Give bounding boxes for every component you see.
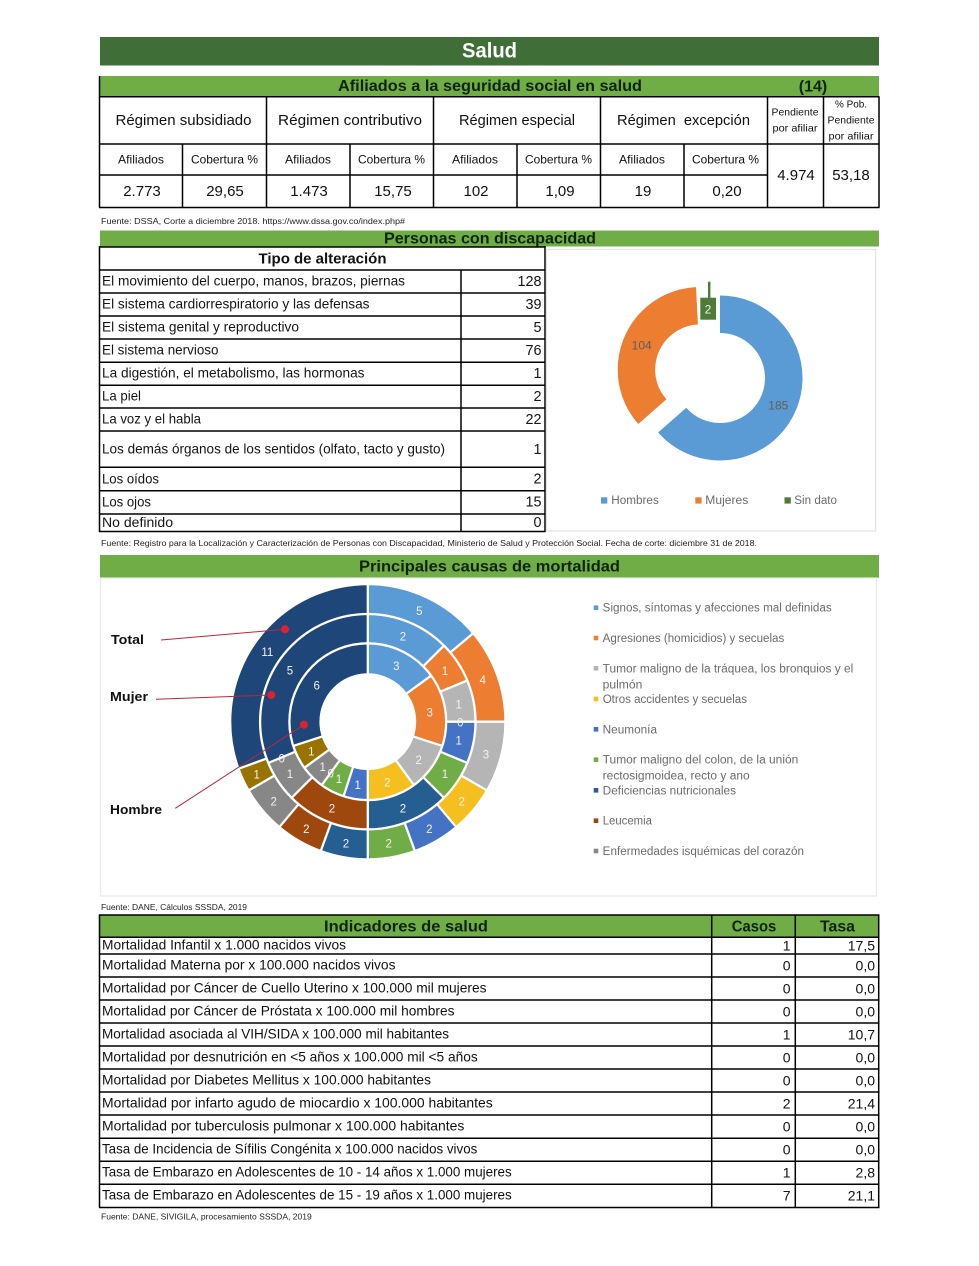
legend: causas de mortalidad: Tumor maligno de la tráquea, los bronquios y el xyxy=(603,663,853,675)
values: afiliados y cobertura: 15,75 xyxy=(374,183,412,200)
column headers: pendiente por afiliar: % Pob. xyxy=(835,98,867,110)
row: mortalidad materna: 0,0 xyxy=(856,957,875,973)
row: movimiento: El movimiento del cuerpo, manos, brazos, piernas xyxy=(102,273,405,289)
row: infarto xyxy=(102,1095,875,1111)
row: oidos: 2 xyxy=(533,471,542,487)
heading: afiliados: (14) xyxy=(799,78,827,96)
data labels: mujer: 1 xyxy=(287,769,293,781)
row: mortalidad infantil: 17,5 xyxy=(848,937,875,953)
column headers: pendiente por afiliar: Pendiente xyxy=(828,114,875,126)
title: Salud xyxy=(462,40,517,62)
source note: DANE calculos: Fuente: DANE, Cálculos SSSDA, 2019 xyxy=(101,902,247,912)
row: voz y habla: 22 xyxy=(525,412,542,428)
donut chart: 2 xyxy=(705,302,712,316)
row: voz y habla xyxy=(102,411,542,428)
values: afiliados y cobertura xyxy=(123,167,870,200)
values: afiliados y cobertura: 0,20 xyxy=(712,183,742,200)
data labels: hombre xyxy=(308,661,433,792)
row: mortalidad infantil: Mortalidad Infantil x 1.000 nacidos vivos xyxy=(102,937,346,953)
data labels: total: 2 xyxy=(385,838,392,850)
sub-headers: afiliados y cobertura: Afiliados xyxy=(118,152,164,166)
data labels: mujer: 2 xyxy=(329,803,335,815)
row: VIH/SIDA: 10,7 xyxy=(848,1026,875,1042)
legend: causas de mortalidad: Enfermedades isquémicas del corazón xyxy=(603,846,804,858)
legend: causas de mortalidad: Tumor maligno del colon, de la unión xyxy=(603,755,798,767)
data labels: total: 2 xyxy=(343,838,349,850)
row: genital: El sistema genital y reproductivo xyxy=(102,319,299,335)
row: embarazo 10-14 xyxy=(102,1164,875,1180)
data labels: total: 2 xyxy=(458,797,465,809)
sub-headers: afiliados y cobertura xyxy=(118,152,759,166)
row: movimiento xyxy=(102,273,542,290)
row: ojos xyxy=(102,493,542,510)
legend: sexo xyxy=(601,495,837,507)
data labels: total xyxy=(253,606,489,850)
data labels: total: 1 xyxy=(253,769,260,781)
column headers: pendiente por afiliar: por afiliar xyxy=(828,130,874,142)
column headers: regimenes: Régimen excepción xyxy=(617,112,750,129)
row: tuberculosis: 0 xyxy=(783,1118,791,1134)
row: cardiorrespiratorio xyxy=(102,296,542,313)
legend: causas de mortalidad: Deficiencias nutricionales xyxy=(603,785,736,797)
sub-headers: afiliados y cobertura: Cobertura % xyxy=(525,152,592,166)
row: desnutricion: 0 xyxy=(783,1049,791,1065)
row: sifilis congenita: 0,0 xyxy=(856,1141,875,1157)
row: VIH/SIDA: Mortalidad asociada al VIH/SIDA x 100.000 mil habitantes xyxy=(102,1026,449,1042)
row: cancer de cuello uterino: Mortalidad por Cáncer de Cuello Uterino x 100.000 mil mujeres xyxy=(102,980,486,996)
row: infarto: 2 xyxy=(783,1095,791,1111)
row: genital: 5 xyxy=(533,320,542,336)
row: no definido: 0 xyxy=(533,515,542,531)
data labels: total: 4 xyxy=(479,675,486,687)
legend: causas de mortalidad: Leucemia xyxy=(603,816,653,828)
data labels: hombre: 1 xyxy=(354,780,361,792)
donut chart: 104 xyxy=(632,338,652,352)
callout: mujer xyxy=(110,689,275,704)
row: tuberculosis: 0,0 xyxy=(856,1118,875,1134)
data labels: hombre: 0 xyxy=(327,769,334,781)
data labels: hombre: 6 xyxy=(313,680,320,692)
row: infarto: 21,4 xyxy=(848,1095,875,1111)
row: cardiorrespiratorio: El sistema cardiorrespiratorio y las defensas xyxy=(102,296,370,312)
row: no definido xyxy=(102,514,542,531)
row: sifilis congenita xyxy=(102,1141,875,1157)
data labels: hombre: 1 xyxy=(308,747,315,759)
row: voz y habla: La voz y el habla xyxy=(102,411,201,427)
data labels: total: 2 xyxy=(303,824,310,836)
row: mortalidad materna xyxy=(102,957,875,973)
row: nervioso xyxy=(102,342,542,359)
row: mortalidad infantil xyxy=(102,937,875,953)
callout: total: Total xyxy=(111,632,144,647)
table header: tipo de alteracion: Tipo de alteración xyxy=(258,252,386,268)
legend: sexo: Mujeres xyxy=(705,495,749,507)
row: desnutricion xyxy=(102,1049,875,1065)
data labels: mujer: 1 xyxy=(442,666,448,678)
legend: sexo: Hombres xyxy=(611,495,659,507)
row: demas organos: Los demás órganos de los sentidos (olfato, tacto y gusto) xyxy=(102,441,445,457)
source note: DANE SIVIGILA: Fuente: DANE, SIVIGILA, procesamiento SSSDA, 2019 xyxy=(101,1212,312,1222)
row: infarto: Mortalidad por infarto agudo de miocardio x 100.000 habitantes xyxy=(102,1095,493,1111)
callout: hombre xyxy=(110,721,308,817)
values: afiliados y cobertura: 102 xyxy=(463,183,489,200)
values: afiliados y cobertura: 29,65 xyxy=(206,183,244,200)
heading: afiliados: Afiliados a la seguridad social en salud xyxy=(338,78,642,95)
row: embarazo 15-19: Tasa de Embarazo en Adolescentes de 15 - 19 años x 1.000 mujeres xyxy=(102,1187,512,1203)
donut chart xyxy=(632,282,789,442)
sub-headers: afiliados y cobertura: Afiliados xyxy=(619,152,665,166)
row: no definido: No definido xyxy=(102,514,173,530)
panel: mortalidad xyxy=(100,578,876,896)
panel: afiliados a la seguridad social xyxy=(99,76,880,208)
row: embarazo 10-14: Tasa de Embarazo en Adolescentes de 10 - 14 años x 1.000 mujeres xyxy=(102,1164,512,1180)
heading: afiliados xyxy=(100,76,879,96)
row: cancer de cuello uterino: 0 xyxy=(783,980,791,996)
values: afiliados y cobertura: 4.974 xyxy=(777,167,815,184)
table header: indicadores, casos, tasa: Tasa xyxy=(820,919,855,936)
row: piel: La piel xyxy=(102,388,141,404)
row: mortalidad materna: 0 xyxy=(783,957,791,973)
row: nervioso: El sistema nervioso xyxy=(102,342,219,358)
sub-headers: afiliados y cobertura: Afiliados xyxy=(452,152,498,166)
row: cancer de prostata: 0,0 xyxy=(856,1003,875,1019)
values: afiliados y cobertura: 53,18 xyxy=(832,167,870,184)
row: cancer de prostata xyxy=(102,1003,875,1019)
data labels: mujer: 1 xyxy=(455,699,462,711)
callout: hombre: Hombre xyxy=(110,802,162,817)
row: sifilis congenita: Tasa de Incidencia de Sífilis Congénita x 100.000 nacidos vivos xyxy=(102,1141,477,1157)
row: sifilis congenita: 0 xyxy=(783,1141,791,1157)
data labels: mujer: 2 xyxy=(400,631,406,643)
data labels: total: 3 xyxy=(483,749,489,761)
panel: donut personas con discapacidad xyxy=(546,250,876,531)
row: cancer de prostata: 0 xyxy=(783,1003,791,1019)
source note: registro: Fuente: Registro para la Localización y Caracterización de Personas con Discapacidad, Ministerio de Salud y Protección Social. Fecha de corte: diciembre 31 de 2018. xyxy=(101,538,757,548)
heading: personas con discapacidad xyxy=(100,230,879,248)
data labels: total: 2 xyxy=(270,797,277,809)
row: cancer de cuello uterino xyxy=(102,980,875,996)
sub-headers: afiliados y cobertura: Cobertura % xyxy=(358,152,425,166)
table header: indicadores, casos, tasa: Casos xyxy=(732,919,776,936)
row: VIH/SIDA xyxy=(102,1026,875,1042)
sub-headers: afiliados y cobertura: Cobertura % xyxy=(692,152,759,166)
row: ojos: 15 xyxy=(525,494,542,510)
row: embarazo 10-14: 1 xyxy=(783,1164,791,1180)
values: afiliados y cobertura: 1.473 xyxy=(290,183,328,200)
row: mortalidad materna: Mortalidad Materna por x 100.000 nacidos vivos xyxy=(102,957,396,973)
table header: indicadores, casos, tasa xyxy=(100,915,879,937)
row: diabetes: 0 xyxy=(783,1072,791,1088)
row: diabetes: 0,0 xyxy=(856,1072,875,1088)
row: VIH/SIDA: 1 xyxy=(783,1026,791,1042)
row: cardiorrespiratorio: 39 xyxy=(525,297,542,313)
data labels: mujer xyxy=(278,631,464,815)
data labels: mujer: 1 xyxy=(455,736,462,748)
row: embarazo 15-19: 21,1 xyxy=(848,1187,875,1203)
table: tipo de alteracion xyxy=(99,246,546,532)
row: oidos xyxy=(102,470,542,487)
data labels: total: 2 xyxy=(426,824,433,836)
legend: causas de mortalidad xyxy=(594,603,853,858)
column headers: pendiente por afiliar: Pendiente xyxy=(772,106,819,118)
row: embarazo 15-19 xyxy=(102,1187,875,1203)
data labels: hombre: 1 xyxy=(319,762,326,774)
heading: principales causas de mortalidad: Principales causas de mortalidad xyxy=(359,558,620,576)
row: mortalidad infantil: 1 xyxy=(783,937,791,953)
data labels: total: 5 xyxy=(416,606,423,618)
row: diabetes xyxy=(102,1072,875,1088)
sub-headers: afiliados y cobertura: Afiliados xyxy=(285,152,331,166)
sunburst chart xyxy=(238,584,506,859)
legend: causas de mortalidad: Signos, síntomas y afecciones mal definidas xyxy=(603,603,832,615)
column headers: regimenes: Régimen especial xyxy=(459,112,575,129)
heading: personas con discapacidad: Personas con discapacidad xyxy=(384,231,596,248)
row: desnutricion: Mortalidad por desnutrición en <5 años x 100.000 mil <5 años xyxy=(102,1049,478,1065)
column headers: pendiente por afiliar xyxy=(772,98,875,142)
row: digestion: 1 xyxy=(533,366,542,382)
heading: principales causas de mortalidad xyxy=(100,555,879,578)
row: nervioso: 76 xyxy=(525,343,542,359)
row: piel xyxy=(102,388,542,405)
row: diabetes: Mortalidad por Diabetes Mellitus x 100.000 habitantes xyxy=(102,1072,431,1088)
row: ojos: Los ojos xyxy=(102,493,151,509)
data labels: mujer: 2 xyxy=(400,803,406,815)
table: indicadores de salud xyxy=(99,914,880,1208)
data labels: hombre: 3 xyxy=(426,707,433,719)
data labels: mujer: 5 xyxy=(287,666,293,678)
legend: sexo: Sin dato xyxy=(794,495,837,507)
source note: DSSA: Fuente: DSSA, Corte a diciembre 2018. https://www.dssa.gov.co/index.php# xyxy=(101,216,405,226)
callout: mujer: Mujer xyxy=(110,689,148,704)
legend: causas de mortalidad: pulmón xyxy=(603,680,642,692)
row: digestion: La digestión, el metabolismo, las hormonas xyxy=(102,365,364,381)
ring: hombre xyxy=(304,658,431,785)
column headers: regimenes: Régimen subsidiado xyxy=(116,112,252,129)
column headers: regimenes xyxy=(116,112,750,129)
legend: causas de mortalidad: Agresiones (homicidios) y secuelas xyxy=(603,633,785,645)
row: embarazo 10-14: 2,8 xyxy=(856,1164,875,1180)
values: afiliados y cobertura: 1,09 xyxy=(545,183,575,200)
data labels: hombre: 2 xyxy=(384,777,391,789)
callout: total xyxy=(111,625,289,647)
table header: indicadores, casos, tasa: Indicadores de salud xyxy=(324,919,488,936)
ring: total xyxy=(246,600,490,844)
row: piel: 2 xyxy=(533,389,542,405)
title xyxy=(100,37,879,66)
row: genital xyxy=(102,319,542,336)
data labels: mujer: 0 xyxy=(278,753,285,765)
data labels: hombre: 3 xyxy=(393,661,400,673)
values: afiliados y cobertura: 19 xyxy=(635,183,651,200)
row: cancer de cuello uterino: 0,0 xyxy=(856,980,875,996)
row: demas organos: 1 xyxy=(533,442,542,458)
column headers: regimenes: Régimen contributivo xyxy=(278,112,422,129)
values: afiliados y cobertura: 2.773 xyxy=(123,183,161,200)
data labels: mujer: 1 xyxy=(442,769,448,781)
donut chart: 185 xyxy=(768,398,789,412)
data labels: total: 11 xyxy=(261,647,273,659)
sub-headers: afiliados y cobertura: Cobertura % xyxy=(191,152,258,166)
legend: causas de mortalidad: Otros accidentes y secuelas xyxy=(603,694,747,706)
row: tuberculosis xyxy=(102,1118,875,1134)
row: embarazo 15-19: 7 xyxy=(783,1187,791,1203)
row: movimiento: 128 xyxy=(517,274,542,290)
row: desnutricion: 0,0 xyxy=(856,1049,875,1065)
row: oidos: Los oídos xyxy=(102,470,159,486)
data labels: hombre: 1 xyxy=(336,774,342,786)
legend: causas de mortalidad: rectosigmoidea, recto y ano xyxy=(603,771,750,783)
data labels: hombre: 2 xyxy=(415,755,422,767)
row: tuberculosis: Mortalidad por tuberculosis pulmonar x 100.000 habitantes xyxy=(102,1118,464,1134)
row: cancer de prostata: Mortalidad por Cáncer de Próstata x 100.000 mil hombres xyxy=(102,1003,454,1019)
legend: causas de mortalidad: Neumonía xyxy=(603,724,658,736)
row: digestion xyxy=(102,365,542,382)
ring: mujer xyxy=(275,629,461,815)
data labels: mujer: 0 xyxy=(457,718,464,730)
column headers: pendiente por afiliar: por afiliar xyxy=(772,122,818,134)
